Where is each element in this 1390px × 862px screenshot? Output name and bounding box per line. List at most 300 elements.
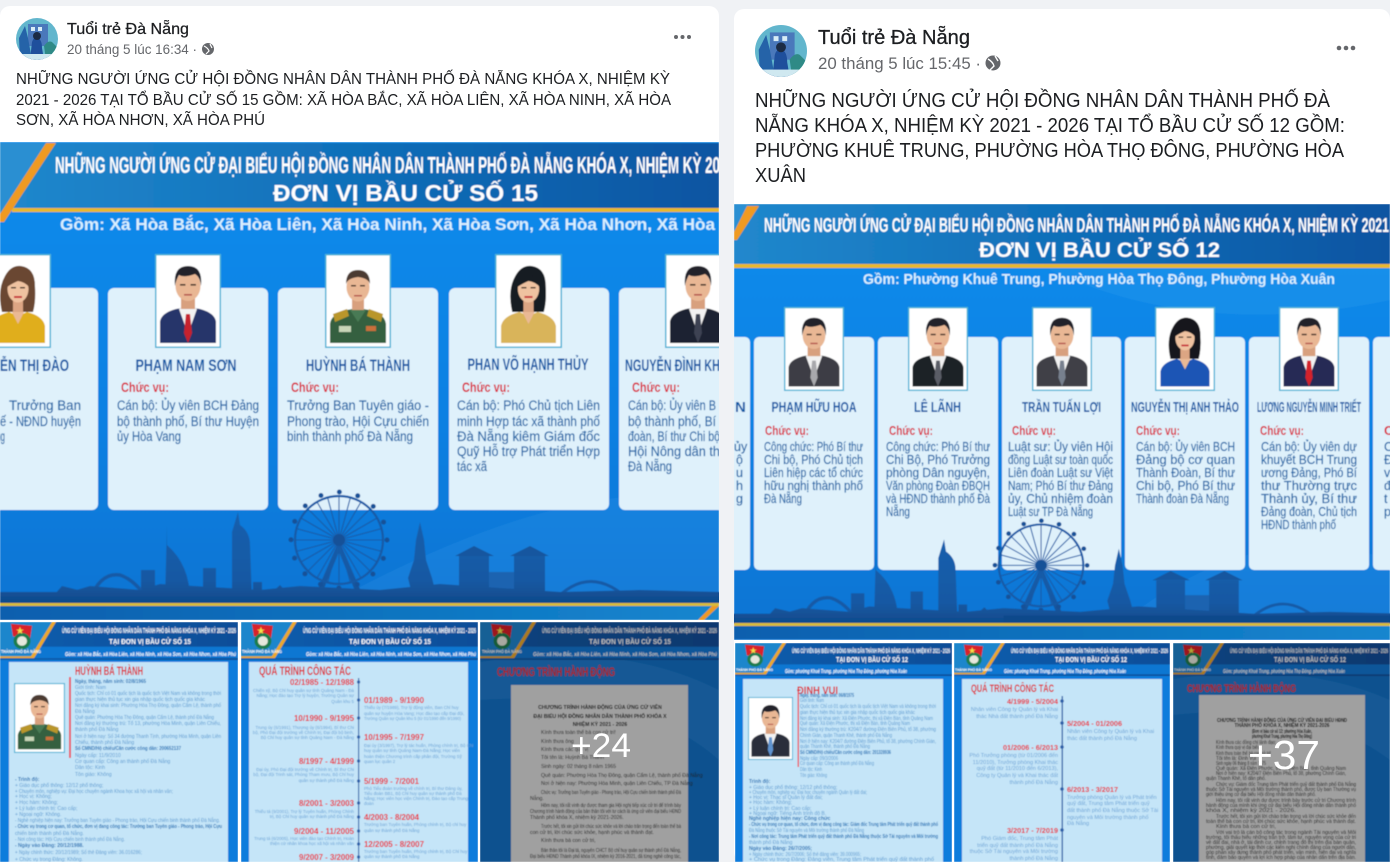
candidate card: Lương Nguyễn Minh Triết (1249, 308, 1369, 570)
banner area list: Gồm: Xã Hòa Bắc, Xã Hòa Liên, Xã Hòa Ninh, Xã Hòa Sơn, Xã Hòa Nhơn, Xã Hòa (60, 215, 716, 234)
avatar: Tuổi trẻ Đà Nẵng (16, 18, 58, 60)
thumbnail: candidate profile, Đinh Vui: Trình độ: (749, 779, 771, 785)
candidate card: Lê Lãnh: Chi Bộ, Phó Trưởng (886, 453, 990, 467)
thumbnail: candidate profile, Đinh Vui: + Ngày chính thức: 26/7/2006; Số thẻ đảng viên: 39.000965; (749, 852, 861, 858)
candidate card: Nguyễn Đình Khôi (618, 253, 719, 511)
thumbnail: action programme, +24 more photos: con cử tri, lời chúc sức khỏe, hạnh phúc và thành đạt. (530, 829, 654, 836)
thumbnail: action programme, +24 more photos: Sinh ngày: 02 tháng 8 năm 1965 (541, 764, 616, 770)
candidate card: Trần Tuấn Lợi: Luật sư TP Đà Nẵng (1008, 504, 1093, 519)
thumbnail: candidate profile, Huỳnh Bá Thành: + Chuyên môn, nghiệp vụ: Đại học chuyên ngành Khoa học xã hội và nhân văn; (15, 789, 173, 795)
thumbnail: candidate profile, Huỳnh Bá Thành: Đà Nẵng (75, 708, 95, 715)
thumbnail: candidate profile, Đinh Vui: Tôn giáo: Không (800, 773, 827, 779)
thumbnail: candidate profile, Huỳnh Bá Thành: Số CMND/Hộ chiếu/Căn cước công dân: 200652137 (75, 745, 181, 752)
candidate card: Nguyễn Thị Đào: ỄN THỊ ĐÀO (0, 356, 69, 375)
thumbnail: candidate profile, Huỳnh Bá Thành: - Trình độ: (15, 777, 40, 783)
thumbnail: action programme, +37 more photos (1173, 643, 1390, 862)
thumbnail: career timeline, Đinh Vui: thành phố Đà Nẵng (1009, 779, 1058, 786)
thumbnail: career timeline, Đinh Vui: quỹ đất (từ 11/2010 đến 6/2013), (977, 766, 1058, 772)
thumbnail: action programme, +24 more photos: Quê quán: Phường Hòa Thọ Đông, quận Cẩm Lệ, thành phố Đà Nẵng (541, 772, 703, 779)
thumbnail: career timeline, Huỳnh Bá Thành: đoàn (364, 801, 374, 806)
thumbnail: action programme, +24 more photos: Đại biểu HĐND Thành phố khóa IX, nhiệm kỳ 2016-2021, đã từng nghề công tác, (530, 853, 681, 860)
candidate card: Nguyễn Đình Khôi: đoàn, Bí thư Chi bộ (628, 429, 720, 444)
candidate card: Huỳnh Bá Thành (278, 255, 438, 510)
post text: NHỮNG NGƯỜI ỨNG CỬ HỘI ĐỒNG NHÂN DÂN THÀNH PHỐ ĐÀ NẴNG KHÓA X, NHIỆM KỲ (16, 68, 670, 88)
thumbnail: action programme, +37 more photos: THÀNH PHỐ KHÓA X, NHIỆM KỲ 2021-2026 (1234, 721, 1330, 729)
thumbnail: career timeline, Huỳnh Bá Thành: Đại úy (3/1997), Trợ lý tác huấn, Phòng chính trị, Bộ Chỉ (364, 743, 473, 748)
thumbnail: candidate profile, Huỳnh Bá Thành: - Ngày vào Đảng: 20/12/1988. (15, 843, 84, 849)
candidate card: Huỳnh Bá Thành: Phong trào, Hội Cựu chiến (287, 414, 429, 429)
banner title: NHỮNG NGƯỜI ỨNG CỬ ĐẠI BIỂU HỘI ĐỒNG NHÂN DÂN THÀNH PHỐ ĐÀ NẴNG KHÓA X, NHIỆM KỲ 20 (55, 150, 720, 178)
candidate card: Nguyễn Thị Đào: Trưởng Ban (9, 398, 81, 413)
thumbnail: career timeline, Huỳnh Bá Thành: THÀNH PHỐ ĐÀ NẴNG (242, 649, 282, 654)
thumbnail: career timeline, Huỳnh Bá Thành: Đại úy, Phó Đại đội trưởng về Chính trị, Bí thư Chi (256, 767, 354, 772)
thumbnail: action programme, +37 more photos: hành động của mình khi ứng cử đại biểu Hội đồng nhân dân thành phố (1206, 802, 1356, 809)
city skyline with ferris wheel (0, 492, 720, 603)
thumbnail: candidate profile, Đinh Vui: - Chức vụ trong cơ quan, tổ chức, đơn vị đang công tác: Giám đốc Trung tâm Phát triển quỹ đất thành phố (749, 821, 938, 828)
panel: left candidate banner, unit 15 (0, 142, 749, 620)
thumbnail: action programme, +24 more photos: Chức vụ: Trưởng ban Tuyên giáo - Phong trào, Hội Cựu chiến binh thành phố Đà (541, 789, 681, 796)
thumbnail: career timeline, Huỳnh Bá Thành: bộ, Phó Đại đội trưởng về Chính trị, Đại đội bộ binh, (253, 730, 354, 735)
thumbnail: candidate profile, Huỳnh Bá Thành: + Giáo dục phổ thông: 12/12 phổ thông; (15, 782, 103, 789)
candidate card: Lương Nguyễn Minh Triết: thư Thường trực (1261, 479, 1357, 493)
candidate card: Nguyễn Thị Anh Thảo: Chi bộ, Phó Bí thư (1136, 479, 1235, 493)
thumbnail: action programme, +37 more photos: quận Thanh Khê, tổ dân phố. (1206, 775, 1266, 782)
thumbnail: career timeline, Huỳnh Bá Thành: quân sự thành phố Đà Nẵng (364, 828, 420, 833)
candidate card: Lê Lãnh (878, 308, 998, 570)
thumbnail: career timeline, Đinh Vui: Công ty Quản lý và Khai thác đất (976, 773, 1058, 779)
city skyline with ferris wheel (716, 521, 1390, 624)
candidate card: Huỳnh Bá Thành: HUỲNH BÁ THÀNH (306, 356, 410, 375)
thumbnail: career timeline, Huỳnh Bá Thành (241, 622, 478, 862)
thumbnail: career timeline, Huỳnh Bá Thành: Trung úy (6/1991), Thượng úy (6/1994), Bí thư Chi (255, 725, 354, 730)
thumbnail: career timeline, Đinh Vui: quỹ đất, Trung tâm Phát triển quỹ (1067, 800, 1150, 807)
thumbnail: career timeline, Huỳnh Bá Thành: TẠI ĐƠN VỊ BẦU CỬ SỐ 15 (349, 636, 431, 646)
thumbnail: career timeline, Đinh Vui: Phó Giám đốc, Trung tâm Phát (981, 836, 1058, 842)
candidate card: previous, clipped: N (735, 399, 746, 416)
thumbnail: action programme, +37 more photos: Kính thưa quý vị đại biểu; (1216, 744, 1261, 751)
thumbnail: candidate profile, Huỳnh Bá Thành: Nơi đăng ký khai sinh: Phường Hòa Thọ Đông, quận Cẩm Lệ, thành phố (75, 702, 221, 709)
candidate card: Nguyễn Thị Anh Thảo (1125, 308, 1245, 570)
post timestamp: 20 tháng 5 lúc 16:34 · (67, 42, 197, 57)
thumbnail: candidate profile, Huỳnh Bá Thành: - Chức vụ trong cơ quan, tổ chức, đơn vị đang công tác: Trưởng ban Tuyên giáo - Phong trào, Hội Cựu (15, 823, 222, 830)
thumbnail: career timeline, Huỳnh Bá Thành: Trung tá (6/2005), Học viên đào tạo Chính trị, Hoàn (254, 836, 355, 841)
thumbnail: action programme, +37 more photos: Sinh ngày 06 tháng 8 năm 1975 (1216, 761, 1266, 767)
thumbnail: candidate profile, Đinh Vui: ĐINH VUI (797, 685, 838, 697)
thumbnail: career timeline, Huỳnh Bá Thành: 12/2005 - 8/2007 (364, 839, 424, 849)
thumbnail: career timeline, Huỳnh Bá Thành: Tiểu đoàn BB1, Bộ Chỉ huy quân sự thành phố Đà (364, 791, 462, 796)
candidate card: Nguyễn Đình Khôi: Cán bộ: Ủy viên B (628, 398, 716, 413)
thumbnail: career timeline, Đinh Vui: Đà Nẵng (1067, 820, 1089, 827)
candidate card: Nguyễn Thị Anh Thảo: Cán bộ: Ủy viên BCH (1136, 439, 1235, 454)
candidate card: Lương Nguyễn Minh Triết: Thành ủy, Bí thư (1261, 492, 1357, 506)
candidate card: Nguyễn Thị Anh Thảo: Đảng bộ cơ quan (1136, 453, 1235, 467)
panel: right Facebook post (734, 9, 1390, 862)
thumbnail: career timeline, Huỳnh Bá Thành: 10/1990 - 9/1995 (294, 713, 354, 723)
thumbnail: career timeline, Đinh Vui: TẠI ĐƠN VỊ BẦU CỬ SỐ 12 (1055, 654, 1127, 664)
candidate card: previous, clipped: h (736, 479, 743, 493)
thumbnail: candidate profile, Đinh Vui: + Giáo dục phổ thông: 12/12 phổ thông; (749, 784, 837, 791)
thumbnail: candidate profile, Huỳnh Bá Thành: + Ngày chính thức: 20/12/1989; Số thẻ Đảng viên: 36.016286; (15, 850, 142, 856)
candidate card: Lương Nguyễn Minh Triết: ương Đảng, Phó Bí (1261, 466, 1357, 480)
thumbnail: action programme, +24 more photos: Tôi tên là: Huỳnh Bá Thành (541, 755, 604, 761)
thumbnail: action programme, +24 more photos: THÀNH PHỐ ĐÀ NẴNG (482, 649, 522, 654)
thumbnail: candidate profile, Đinh Vui: Nơi đăng ký khai sinh: Xã Điện Phước, thị xã Điện Bàn, tỉnh Quảng Nam (800, 715, 933, 722)
thumbnail: career timeline, Huỳnh Bá Thành: huy quân sự tỉnh Quảng Nam-Đà Nẵng; Học viên (364, 748, 460, 753)
thumbnail: action programme, +37 more photos: toàn thể bà con cử tri, lời chúc sức khỏe, hạnh phúc và thành đạt. (1206, 818, 1356, 825)
thumbnail: career timeline, Đinh Vui: triển quỹ đất thành phố Đà Nẵng (977, 842, 1058, 849)
candidate card: Nguyễn Thị Anh Thảo: NGUYỄN THỊ ANH THẢO (1131, 399, 1239, 416)
thumbnail: candidate profile, Huỳnh Bá Thành: - Nghề nghiệp hiện nay: Trưởng ban Tuyên giáo - Phong trào, Hội Cựu chiến binh thành phố Đà Nẵng. (15, 817, 220, 824)
thumbnail: career timeline, Huỳnh Bá Thành: Thiếu tá (9/2001), Trợ lý Tuyên huấn, Phòng Chính (255, 809, 355, 814)
thumbnail: career timeline, Đinh Vui: 5/2004 - 01/2006 (1067, 719, 1122, 728)
thumbnail: action programme, +24 more photos: Kính thưa toàn thể bà con cử tri! (541, 729, 616, 736)
candidate card: Trần Tuấn Lợi: Chức vụ: (1012, 423, 1056, 438)
thumbnail: action programme, +24 more photos: NHIỆM KỲ 2021 - 2026 (573, 720, 627, 728)
thumbnail: action programme, +37 more photos: tình, đảm bảo quyền và lợi ích hợp pháp của nhân dân trên địa bàn. (1206, 854, 1356, 861)
icon: more menu (1337, 46, 1355, 50)
thumbnail: candidate profile, Đinh Vui: + Học hàm: Không; (749, 800, 792, 806)
thumbnail: action programme, +37 more photos: khóa X, nhiệm kỳ 2021 - 2026. (1206, 808, 1296, 814)
candidate card: Nguyễn Đình Khôi: Chức vụ: (632, 379, 680, 395)
thumbnail: candidate profile, Đinh Vui: + Lý luận chính trị: Cao cấp; (749, 806, 811, 812)
thumbnail: action programme, +37 more photos: Với vai trò là cán bộ công tác trong ngành Tài nguyên và Môi (1216, 830, 1356, 836)
candidate card: Nguyễn Thị Anh Thảo: Chức vụ: (1136, 423, 1180, 438)
thumbnail: candidate profile, Đinh Vui: Nơi đăng ký thường trú: K204/7 đường Điện Biên Phủ, tổ 38, phường (800, 726, 936, 733)
candidate card: Phan Võ Hạnh Thủy: Chức vụ: (462, 379, 510, 395)
thumbnail: career timeline, Huỳnh Bá Thành: trị, Bộ Chỉ huy quân sự thành phố Đà Nẵng (270, 814, 355, 819)
candidate card: Huỳnh Bá Thành: Trưởng Ban Tuyên giáo - (287, 398, 429, 413)
thumbnail: action programme, +37 more photos: CHƯƠNG TRÌNH HÀNH ĐỘNG CỦA ỨNG CỬ VIÊN ĐẠI BIỂU HĐND (1217, 716, 1347, 724)
thumbnail: candidate profile, Đinh Vui: Đà Nẵng thuộc Sở Tài nguyên và Môi trường thành phố Đà Nẵng (749, 827, 864, 834)
thumbnail: action programme, +37 more photos: về đất đai, nhà ở, tái định cư, chỉnh trang đô thị trên địa bàn quận, (1206, 839, 1356, 846)
thumbnail: career timeline, Huỳnh Bá Thành: Nẵng; Học viên học viện Chính trị, Đào tạo cấp Trung (364, 796, 469, 801)
overlay: +37 more: +37 (1248, 732, 1320, 778)
candidate card: Phan Võ Hạnh Thủy: minh Hợp tác xã thành phố (457, 414, 600, 429)
candidate card: previous, clipped: u (736, 466, 743, 480)
thumbnail: candidate profile, Huỳnh Bá Thành: Dân tộc: Kinh (75, 765, 105, 771)
thumbnail: action programme, +37 more photos: Trước hết, tôi xin gửi lời chào trân trọng và lời chúc sức khỏe đến (1216, 813, 1356, 820)
post text: SƠN, XÃ HÒA NHƠN, XÃ HÒA PHÚ (16, 109, 265, 129)
candidate card: Lê Lãnh: phòng Dân nguyện, (886, 466, 990, 480)
thumbnail: career timeline, Đinh Vui: Phó Trưởng phòng (từ 01/2006 đến (969, 752, 1058, 759)
thumbnail: action programme, +37 more photos: (Đơn vị bầu cử số 12: phường Hòa Xuân, (1252, 728, 1312, 735)
thumbnail: action programme, +24 more photos: Hôm nay, tôi rất vinh dự được tham gia Hội nghị tiếp xúc cử tri để trình bày (541, 802, 681, 809)
candidate card: Huỳnh Bá Thành: binh thành phố Đà Nẵng (287, 429, 413, 444)
footer band (734, 623, 1390, 639)
candidate card: previous, clipped: g (736, 492, 743, 506)
thumbnail: candidate profile, Huỳnh Bá Thành: + Học vị: Không; (15, 794, 52, 800)
thumbnail: action programme, +37 more photos: giới thiệu ứng cử đại biểu Hội đồng nhân dân thành phố. (1206, 791, 1316, 798)
thumbnail: career timeline, Đinh Vui: Trưởng phòng Quản lý và Phát triển (1067, 794, 1157, 801)
thumbnail: career timeline, Đinh Vui: thác đất thành phố Đà Nẵng (1067, 735, 1137, 742)
post text (755, 88, 1345, 187)
candidate card: Nguyễn Thị Anh Thảo: Thành đoàn Đà Nẵng (1136, 491, 1229, 506)
thumbnail: candidate profile, Huỳnh Bá Thành: + Lý luận chính trị: Cao cấp; (15, 806, 77, 812)
thumbnail: action programme, +24 more photos: ĐẠI BIỂU HỘI ĐỒNG NHÂN DÂN THÀNH PHỐ KHÓA X (533, 712, 667, 720)
thumbnail: career timeline, Huỳnh Bá Thành: Quân khu 5 (331, 699, 355, 704)
thumbnail: action programme, +24 more photos: Thành phố khóa X, nhiệm kỳ 2021-2026. (530, 815, 624, 821)
thumbnail: action programme, +37 more photos: TẠI ĐƠN VỊ BẦU CỬ SỐ 12 (1274, 654, 1346, 664)
candidate card: Trần Tuấn Lợi: Liên đoàn Luật sư Việt (1008, 466, 1113, 480)
thumbnail: career timeline, Huỳnh Bá Thành: quân sự thành phố Đà Nẵng (364, 854, 420, 859)
thumbnail: career timeline, Đinh Vui: Gồm: phường Khuê Trung, phường Hòa Thọ Đông, phường Hòa Xuân (1004, 669, 1126, 675)
thumbnail: career timeline, Huỳnh Bá Thành: quan lục quân 2 (364, 759, 396, 764)
candidate card: Lương Nguyễn Minh Triết: khuyết BCH Trung (1261, 453, 1357, 467)
thumbnail: action programme, +24 more photos: Chương trình hành động của bản thân tôi với tư cách là ứng cử viên đại biểu HĐND (530, 808, 681, 815)
thumbnail: candidate profile, Huỳnh Bá Thành: Nơi ở hiện nay: Số 34 đường Thanh Tịnh, phường Hòa Minh, quận Liên (75, 733, 221, 740)
thumbnail: candidate profile, Đinh Vui: + Học vị: Thạc sĩ Quản lý đất đai; (749, 795, 823, 801)
thumbnail: action programme, +37 more photos: phường, giải quyết kịp thời các kiến nghị chính đáng của người dân, (1206, 844, 1356, 851)
candidate card: Phạm Nam Sơn: Chức vụ: (121, 379, 169, 395)
thumbnail: candidate profile, Huỳnh Bá Thành: - Nơi công tác: Hội Cựu chiến binh thành phố Đà Nẵng. (15, 836, 125, 843)
thumbnail: career timeline, Đinh Vui: 11/2010), Trưởng phòng Khai thác (973, 759, 1058, 766)
candidate card: Phạm Nam Sơn: ủy Hòa Vang (117, 429, 181, 444)
thumbnail: candidate profile, Đinh Vui: THÀNH PHỐ ĐÀ NẴNG (736, 667, 773, 672)
candidate card: Trần Tuấn Lợi (1002, 308, 1121, 570)
thumbnail: candidate profile, Huỳnh Bá Thành: thành phố Đà Nẵng (75, 726, 119, 733)
banner area list: Gồm: Phường Khuê Trung, Phường Hòa Thọ Đông, Phường Hòa Xuân (863, 271, 1335, 288)
thumbnail: candidate profile, Huỳnh Bá Thành: Gồm: xã Hòa Bắc, xã Hòa Liên, xã Hòa Ninh, xã Hòa Sơn, xã Hòa Nhơn, xã Hòa Phú (65, 651, 236, 658)
thumbnail: candidate profile, Đinh Vui: Ngày vào Đảng: 26/7/2005; (749, 846, 812, 852)
candidate card: Lê Lãnh: Công chức: Phó Bí thư (886, 440, 990, 454)
candidate card: Phan Võ Hạnh Thủy: Quỹ Hỗ trợ Phát triển Hợp (457, 444, 600, 459)
thumbnail: career timeline, Huỳnh Bá Thành: Bộ Chỉ huy quân sự tỉnh Quảng Nam - Đà Nẵng (261, 735, 355, 740)
thumbnail: career timeline, Đinh Vui: đất thành phố Đà Nẵng thuộc Sở Tài (1067, 807, 1158, 814)
thumbnail: action programme, +24 more photos: Bản thân tôi là Đại tá, nguyên CHCT Bộ chỉ huy quân sự thành phố Đà Nẵng, (541, 847, 681, 854)
overlay: +24 more: +24 (571, 727, 631, 765)
thumbnail: career timeline, Huỳnh Bá Thành: 9/2004 - 11/2005 (294, 826, 354, 836)
candidate card: Phan Võ Hạnh Thủy: Cán bộ: Phó Chủ tịch Liên (457, 398, 600, 413)
thumbnail: candidate profile, Huỳnh Bá Thành: Tôn giáo: Không (75, 772, 112, 778)
thumbnail: action programme, +24 more photos: Nẵng. (530, 795, 544, 802)
thumbnail: career timeline, Huỳnh Bá Thành: bộ, Đại đội Trinh sát, Phòng Tham mưu, Bộ Chỉ huy (253, 772, 355, 777)
thumbnail: action programme, +24 more photos: TẠI ĐƠN VỊ BẦU CỬ SỐ 15 (589, 636, 671, 646)
thumbnail: action programme, +37 more photos: Kính thưa các đồng chí lãnh đạo; (1216, 740, 1276, 746)
candidate card: Lê Lãnh: Văn phòng Đoàn ĐBQH (886, 479, 990, 493)
panel: left Facebook post (0, 6, 719, 862)
thumbnail: career timeline, Đinh Vui: Nhân viên Công ty Quản lý và Khai (971, 707, 1058, 713)
thumbnail: candidate profile, Huỳnh Bá Thành: + Học hàm: Không; (15, 800, 58, 806)
thumbnail: candidate profile, Huỳnh Bá Thành: gian thực hiện thủ tục xin gia nhập quốc tịch quốc gia khác (75, 696, 205, 703)
thumbnail: action programme, +37 more photos: trường, tôi thấu hiểu những trăn trở, tâm tư, nguyện vọng của cử tri (1206, 834, 1356, 841)
thumbnail: career timeline, Huỳnh Bá Thành: Chiến sỹ, Bộ Chỉ huy quân sự tỉnh Quảng Nam - Đà (253, 688, 355, 693)
thumbnail: candidate profile, Huỳnh Bá Thành: Ngày, tháng, năm sinh: 02/8/1965 (75, 679, 146, 685)
candidate card: Lương Nguyễn Minh Triết: Chức vụ: (1260, 423, 1304, 438)
thumbnail: career timeline, Đinh Vui: 6/2013 - 3/2017 (1067, 785, 1118, 794)
candidate card: Phạm Hữu Hoa: Công chức: Phó Bí thư (764, 440, 863, 454)
candidate card: Phạm Nam Sơn: PHẠM NAM SƠN (136, 356, 236, 375)
thumbnail: career timeline, Huỳnh Bá Thành: thiện cử nhân khoa học xã hội và nhân văn (270, 841, 355, 846)
thumbnail: candidate profile, Đinh Vui: Nơi ở hiện nay: K204/7 đường Điện Biên Phủ, tổ 38, phường Chính Gián, (800, 738, 936, 745)
thumbnail: candidate profile, Đinh Vui (735, 643, 952, 862)
candidate card: Nguyễn Đình Khôi: NGUYỄN ĐÌNH KH (625, 356, 720, 375)
thumbnail: candidate profile, Đinh Vui: Giới tính: Nam (800, 698, 824, 704)
footer band (0, 603, 719, 620)
candidate card: Phan Võ Hạnh Thủy (449, 255, 609, 510)
thumbnail: career timeline, Huỳnh Bá Thành: ỨNG CỬ VIÊN ĐẠI BIỂU HỘI ĐỒNG NHÂN DÂN THÀNH PHỐ ĐÀ NẴNG KHÓA X, NHIỆM KỲ 2021 - 2026 (303, 625, 476, 635)
candidate card: Trần Tuấn Lợi: ủy, Chủ nhiệm đoàn (1008, 492, 1113, 506)
thumbnail: candidate profile, Đinh Vui: + Ngoại ngữ: Tiếng Anh trình độ B. (749, 811, 826, 817)
thumbnail: action programme, +37 more photos: THÀNH PHỐ ĐÀ NẴNG (1174, 667, 1211, 672)
candidate card: Trần Tuấn Lợi: đồng Luật sư toàn quốc (1008, 453, 1113, 467)
thumbnail: candidate profile, Huỳnh Bá Thành: Giới tính: Nam (75, 685, 106, 691)
thumbnail: career timeline, Huỳnh Bá Thành: 10/1995 - 7/1997 (364, 732, 424, 742)
thumbnail: candidate profile, Huỳnh Bá Thành: ỨNG CỬ VIÊN ĐẠI BIỂU HỘI ĐỒNG NHÂN DÂN THÀNH PHỐ ĐÀ NẴNG KHÓA X, NHIỆM KỲ 2021 - 2026 (62, 625, 236, 635)
post text: 2021 - 2026 TẠI TỔ BẦU CỬ SỐ 15 GỒM: XÃ HÒA BẮC, XÃ HÒA LIÊN, XÃ HÒA NINH, XÃ HÒA (16, 89, 671, 109)
thumbnail: career timeline, Huỳnh Bá Thành: 8/2001 - 3/2003 (299, 798, 354, 808)
thumbnail: action programme, +24 more photos: Trước hết, tôi xin gửi lời chúc sức khỏe và lời chào trân trọng đến toàn thể bà (541, 823, 681, 830)
thumbnail: career timeline, Đinh Vui: thành phố Đà Nẵng (1009, 855, 1058, 862)
thumbnail: action programme, +24 more photos: Nơi ở hiện nay: Phường Hòa Minh, quận Liên Chiểu, TP Đà Nẵng (541, 780, 693, 787)
candidate card: Nguyễn Thị Đào: ế - NĐND huyện (0, 414, 81, 429)
thumbnail: candidate profile, Đinh Vui: Ngày cấp: 09/3/2006 (800, 756, 838, 762)
thumbnail: candidate profile, Đinh Vui: Gồm: phường Khuê Trung, phường Hòa Thọ Đông, phường Hòa Xuân (785, 669, 907, 675)
header band (0, 143, 719, 222)
thumbnail: candidate profile, Đinh Vui: thành phố Đà Nẵng (749, 839, 793, 846)
candidate card: previous, clipped (700, 337, 750, 570)
thumbnail: candidate profile, Đinh Vui: Dân tộc: Kinh (800, 767, 822, 773)
thumbnail: career timeline, Đinh Vui: thác Nhà đất thành phố Đà Nẵng (976, 713, 1058, 720)
thumbnail: action programme, +37 more photos: phường Khuê Trung, phường Hòa Thọ Đông) (1252, 734, 1312, 740)
thumbnail: action programme, +24 more photos: ỨNG CỬ VIÊN ĐẠI BIỂU HỘI ĐỒNG NHÂN DÂN THÀNH PHỐ ĐÀ NẴNG KHÓA X, NHIỆM KỲ 2021 - 2026 (542, 625, 717, 635)
banner unit heading: ĐƠN VỊ BẦU CỬ SỐ 12 (979, 238, 1220, 262)
thumbnail: candidate profile, Huỳnh Bá Thành: THÀNH PHỐ ĐÀ NẴNG (1, 649, 41, 654)
thumbnail: career timeline, Đinh Vui: ỨNG CỬ VIÊN ĐẠI BIỂU HỘI ĐỒNG NHÂN DÂN THÀNH PHỐ ĐÀ NẴNG KHÓA X, NHIỆM KỲ 2021 - 2026 (1011, 645, 1168, 655)
thumbnail: career timeline, Huỳnh Bá Thành: Gồm: xã Hòa Bắc, xã Hòa Liên, xã Hòa Ninh, xã Hòa Sơn, xã Hòa Nhơn, xã Hòa Phú (306, 651, 476, 658)
post text: NHỮNG NGƯỜI ỨNG CỬ HỘI ĐỒNG NHÂN DÂN THÀNH PHỐ ĐÀ (755, 88, 1331, 112)
banner unit heading: ĐƠN VỊ BẦU CỬ SỐ 15 (273, 178, 538, 206)
thumbnail: career timeline, Đinh Vui: THÀNH PHỐ ĐÀ NẴNG (955, 667, 992, 672)
thumbnail: candidate profile, Đinh Vui: Quốc tịch: Chỉ có 01 quốc tịch là quốc tịch Việt Nam và không trong thời (800, 703, 936, 710)
thumbnail: career timeline, Huỳnh Bá Thành: QUÁ TRÌNH CÔNG TÁC (259, 663, 351, 678)
thumbnail: candidate profile, Huỳnh Bá Thành: Chiểu, thành phố Đà Nẵng (75, 739, 134, 746)
thumbnail: action programme, +37 more photos: Tôi tên là: Đinh Vui (1216, 756, 1256, 762)
candidate card: Phạm Hữu Hoa: Liên hiệp các tổ chức (764, 466, 863, 480)
candidate card: Nguyễn Đình Khôi: Đà Nẵng (628, 459, 672, 474)
thumbnail: candidate profile, Đinh Vui: ỨNG CỬ VIÊN ĐẠI BIỂU HỘI ĐỒNG NHÂN DÂN THÀNH PHỐ ĐÀ NẴNG KHÓA X, NHIỆM KỲ 2021 - 2026 (792, 645, 950, 655)
thumbnail: candidate profile, Huỳnh Bá Thành: Quốc tịch: Chỉ có 01 quốc tịch là quốc tịch Việt Nam và không trong thời (75, 690, 221, 697)
thumbnail: candidate profile, Đinh Vui: + Chuyên môn, nghiệp vụ: Đại học chuyên ngành Quản lý đất đai; (749, 790, 867, 796)
thumbnail: candidate profile, Đinh Vui: Chính Gián, quận Thanh Khê, thành phố Đà Nẵng (800, 732, 892, 739)
post text: PHƯỜNG KHUÊ TRUNG, PHƯỜNG HÒA THỌ ĐÔNG, PHƯỜNG HÒA (755, 139, 1345, 162)
thumbnail: career timeline, Đinh Vui: Nhân viên Công ty Quản lý và Khai (1067, 729, 1154, 735)
thumbnail: career timeline, Huỳnh Bá Thành: 02/1985 - 12/1988 (290, 677, 354, 687)
thumbnail: career timeline, Huỳnh Bá Thành: Trưởng ban Tuyên huấn, Phòng chính trị, Bộ Chỉ huy (364, 849, 468, 854)
thumbnail: action programme, +37 more photos: thuộc Sở Tài nguyên và Môi trường thành phố, được Ủy ban Thường vụ (1206, 786, 1356, 793)
thumbnail: action programme, +24 more photos: Kính thưa các quý vị (541, 747, 588, 753)
candidate card: Lê Lãnh: Nẵng (886, 504, 910, 519)
candidate card: Lê Lãnh: LÊ LÃNH (914, 398, 961, 416)
candidate card: Nguyễn Đình Khôi: bộ thành phố, Bí (628, 414, 716, 429)
thumbnail: candidate profile, Đinh Vui: gian thực hiện thủ tục xin gia nhập quốc tịch quốc gia khác (800, 709, 915, 716)
candidate card: Phạm Hữu Hoa: Chi bộ, Phó Chủ tịch (764, 453, 863, 467)
thumbnail: career timeline, Huỳnh Bá Thành: Trưởng ban Tuyên huấn, Phòng chính trị, Bộ chỉ huy (364, 822, 467, 827)
candidate card: Phạm Hữu Hoa: Chức vụ: (765, 423, 809, 438)
candidate card: Nguyễn Đình Khôi: Hội Nông dân th (628, 444, 720, 459)
thumbnail: candidate profile, Đinh Vui: - Nơi công tác: Trung tâm Phát triển quỹ đất thành phố Đà Nẵng thuộc Sở Tài nguyên và Môi trường (749, 833, 938, 840)
candidate card: Nguyễn Thị Đào (0, 255, 98, 510)
thumbnail: career timeline, Đinh Vui: QUÁ TRÌNH CÔNG TÁC (971, 682, 1054, 695)
candidate card: Phan Võ Hạnh Thủy: PHAN VÕ HẠNH THỦY (468, 354, 589, 374)
thumbnail: candidate profile, Đinh Vui: Số CMND/Hộ chiếu/Căn cước công dân: 201328936 (800, 749, 891, 756)
thumbnail: candidate profile, Huỳnh Bá Thành: Quê quán: Phường Hòa Thọ Đông, quận Cẩm Lệ, thành phố Đà Nẵng (75, 714, 214, 721)
author name: Tuổi trẻ Đà Nẵng (818, 26, 970, 49)
candidate card: Phạm Hữu Hoa: Đà Nẵng (764, 491, 802, 506)
post text: XUÂN (755, 164, 806, 187)
thumbnail: candidate profile, Huỳnh Bá Thành (0, 622, 238, 862)
thumbnail: candidate profile, Huỳnh Bá Thành: Nơi đăng ký thường trú: Tổ 13, phường Hòa Minh, quận Liên Chiểu, (75, 720, 221, 727)
icon: more menu (674, 35, 691, 39)
thumbnail: candidate profile, Huỳnh Bá Thành: chiến binh thành phố Đà Nẵng. (15, 830, 84, 837)
thumbnail: action programme, +24 more photos: CHƯƠNG TRÌNH HÀNH ĐỘNG (497, 664, 615, 679)
thumbnail: action programme, +37 more photos: CHƯƠNG TRÌNH HÀNH ĐỘNG (1187, 682, 1296, 695)
post timestamp: 20 tháng 5 lúc 15:45 · (818, 55, 981, 73)
thumbnail: career timeline, Huỳnh Bá Thành: 9/2007 - 3/2009 (299, 852, 354, 862)
thumbnail: action programme, +37 more photos: góp phần xây dựng thành phố phát triển, văn minh, hiện đại và nghĩa (1206, 849, 1356, 856)
candidate card: previous, clipped: ủy (734, 440, 748, 454)
candidate card: Phan Võ Hạnh Thủy: Đà Nẵng kiêm Giám đốc (457, 429, 600, 444)
candidate card: Phạm Hữu Hoa: PHẠM HỮU HOA (772, 398, 857, 416)
thumbnail: candidate profile, Đinh Vui: Ngày, tháng, năm sinh: 06/8/1975 (800, 693, 854, 699)
candidate card: Nguyễn Thị Anh Thảo: Thành Đoàn, Bí thư (1136, 466, 1235, 480)
thumbnail: candidate profile, Huỳnh Bá Thành: Cơ quan cấp: Công an thành phố Đà Nẵng (75, 758, 171, 765)
thumbnail: career timeline, Huỳnh Bá Thành: Nẵng; Học đào tạo Trợ lý huyện, Trường Quân sự (256, 693, 354, 698)
thumbnail: career timeline, Đinh Vui (954, 643, 1170, 862)
header band (734, 204, 1390, 268)
post text: NẴNG KHÓA X, NHIỆM KỲ 2021 - 2026 TẠI TỔ BẦU CỬ SỐ 12 GỒM: (755, 113, 1345, 137)
thumbnail: candidate profile, Huỳnh Bá Thành: + Ngoại ngữ: Không. (15, 812, 61, 818)
icon: globe (986, 56, 1000, 70)
thumbnail: candidate profile, Đinh Vui: Cơ quan cấp: Công an thành phố Đà Nẵng (800, 760, 874, 767)
thumbnail: career timeline, Huỳnh Bá Thành: 01/1989 - 9/1990 (364, 695, 424, 705)
candidate card: next, clipped: t (1384, 492, 1388, 506)
thumbnail: candidate profile, Huỳnh Bá Thành: TẠI ĐƠN VỊ BẦU CỬ SỐ 15 (109, 636, 191, 646)
author name: Tuổi trẻ Đà Nẵng (67, 19, 189, 38)
candidate card: Phạm Nam Sơn: Cán bộ: Ủy viên BCH Đảng (117, 398, 259, 413)
thumbnail: action programme, +37 more photos: Nơi ở hiện nay: K204/7 Điện Biên Phủ, tổ 38, phường Chính Gián, (1216, 770, 1346, 777)
candidate card: next, clipped (1373, 337, 1390, 570)
thumbnail: action programme, +37 more photos: Hôm nay, tôi rất vinh dự được trình bày trước cử tri Chương trình (1216, 797, 1356, 804)
thumbnail: action programme, +24 more photos: Kính thưa bà con cử tri, (541, 837, 596, 844)
thumbnail: action programme, +37 more photos: Kính thưa toàn thể bà con cử tri! (1216, 750, 1271, 757)
candidate card: Phan Võ Hạnh Thủy: tác xã (457, 459, 487, 474)
thumbnail: career timeline, Đinh Vui: nguyên và Môi trường thành phố (1067, 815, 1148, 821)
candidate card: Lương Nguyễn Minh Triết: Đảng đoàn, Chủ tịch (1261, 505, 1357, 519)
candidate card: Trần Tuấn Lợi: Luật sư: Ủy viên Hội (1008, 439, 1113, 454)
candidate card: Lê Lãnh: và HĐND thành phố Đà (886, 492, 990, 506)
thumbnail: action programme, +37 more photos: Gồm: phường Khuê Trung, phường Hòa Thọ Đông, phường Hòa Xuân (1223, 669, 1345, 675)
thumbnail: action programme, +24 more photos: CHƯƠNG TRÌNH HÀNH ĐỘNG CỦA ỨNG CỬ VIÊN (538, 703, 662, 711)
thumbnail: candidate profile, Huỳnh Bá Thành: Ngày cấp: 11/9/2010 (75, 753, 121, 759)
thumbnail: career timeline, Đinh Vui: 01/2006 - 6/2013 (1003, 743, 1058, 752)
post text (16, 68, 671, 129)
thumbnail: candidate profile, Đinh Vui: Quê quán: Xã Điện Phước, thị xã Điện Bàn, tỉnh Quảng Nam (800, 720, 910, 727)
candidate card: Phạm Hữu Hoa: hữu nghị thành phố (764, 479, 863, 493)
candidate card: Phạm Hữu Hoa (754, 308, 874, 570)
icon: globe (202, 43, 214, 55)
thumbnail: career timeline, Huỳnh Bá Thành: quân sự thành phố Đà Nẵng (299, 778, 355, 783)
thumbnail: action programme, +37 more photos: Quê quán: Xã Điện Phước, thị xã Điện Bàn, tỉnh Quảng Nam (1216, 765, 1346, 772)
candidate card: previous, clipped: ộ (736, 453, 743, 467)
thumbnail: candidate profile, Huỳnh Bá Thành: HUỲNH BÁ THÀNH (75, 663, 143, 678)
thumbnail: career timeline, Đinh Vui: thuộc Sở Tài nguyên và Môi trường (970, 848, 1058, 855)
candidate card: Lương Nguyễn Minh Triết: HĐND thành phố (1261, 518, 1336, 532)
candidate card: Phạm Nam Sơn: bộ thành phố, Bí thư Huyện (117, 414, 259, 429)
thumbnail: career timeline, Huỳnh Bá Thành: 4/2003 - 8/2004 (364, 812, 419, 822)
thumbnail: career timeline, Huỳnh Bá Thành: Trường Quân sự Quân khu 5 (từ 01/1990 đến 9/1990) (364, 716, 461, 721)
thumbnail: career timeline, Huỳnh Bá Thành: hoàn thiện Chương trình cấp phân đội, Trường Sỹ (364, 754, 463, 759)
thumbnail: career timeline, Huỳnh Bá Thành: quân sự huyện Hòa Vang; Học đào tạo cấp Đại đội, (364, 711, 464, 716)
